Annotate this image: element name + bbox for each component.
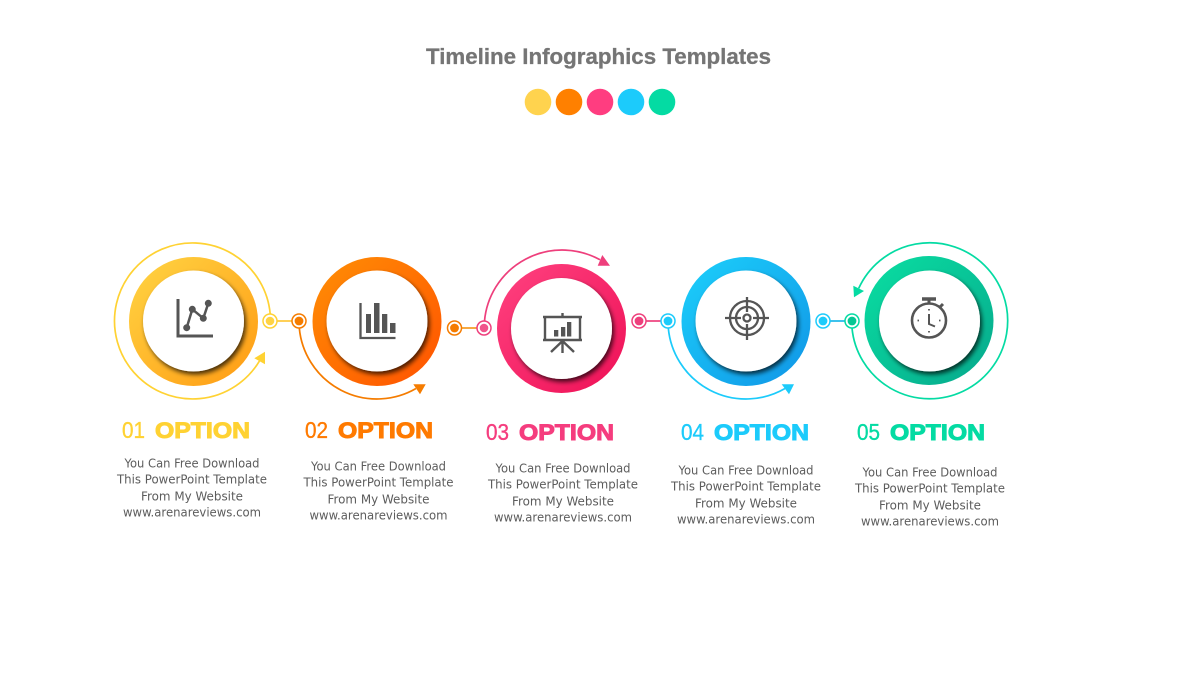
label 2: heading <box>305 417 433 443</box>
step 5: circle with arc <box>852 243 1008 399</box>
label 1: text: You Can Free Download <box>124 456 260 470</box>
label 5: text: From My Website <box>879 498 981 512</box>
label 3: text: You Can Free Download <box>495 461 630 475</box>
label 3: heading <box>486 419 614 445</box>
step 4: circle with arc <box>668 257 810 399</box>
label 3: text: From My Website <box>512 494 614 508</box>
step 3: circle with arc <box>484 250 626 393</box>
icon: stopwatch <box>912 299 946 338</box>
label 1: heading <box>122 417 250 443</box>
icon: target crosshair <box>725 297 769 340</box>
icon: line chart <box>178 299 213 336</box>
label 4: heading <box>681 419 809 445</box>
label 3: heading: OPTION <box>519 420 614 445</box>
label 2: heading: 02 <box>305 417 328 443</box>
label 4: text: From My Website <box>695 496 797 510</box>
label 5: heading: 05 <box>857 419 880 445</box>
connector: step 3 to 4 <box>632 314 675 328</box>
step 2: circle with arc <box>299 257 442 399</box>
label 1: heading: OPTION <box>155 418 250 443</box>
icon: presentation board <box>543 313 582 353</box>
label 4: text: This PowerPoint Template <box>670 479 821 493</box>
label 5: text: www.arenareviews.com <box>861 514 999 528</box>
connector: step 4 to 5 <box>816 314 859 328</box>
label 2: text: www.arenareviews.com <box>310 508 448 522</box>
title: Timeline Infographics Templates <box>426 44 771 69</box>
label 1: text: www.arenareviews.com <box>123 505 261 519</box>
connector: step 2 to 3 <box>448 321 491 335</box>
connector: step 1 to 2 <box>263 314 306 328</box>
label 2: text: From My Website <box>328 492 430 506</box>
label 1: text <box>116 456 267 519</box>
label 1: heading: 01 <box>122 417 145 443</box>
label 1: text: This PowerPoint Template <box>116 472 267 486</box>
label 2: text: You Can Free Download <box>310 459 446 473</box>
label 2: text: This PowerPoint Template <box>303 475 454 489</box>
label 4: text <box>670 463 821 526</box>
label 5: text <box>854 465 1005 528</box>
step 1: circle with arc <box>115 243 270 399</box>
colour dots row <box>525 89 675 115</box>
label 5: heading: OPTION <box>890 420 985 445</box>
label 5: text: This PowerPoint Template <box>854 481 1005 495</box>
label 5: heading <box>857 419 985 445</box>
label 4: text: You Can Free Download <box>678 463 814 477</box>
label 3: text <box>487 461 638 524</box>
label 3: text: www.arenareviews.com <box>494 510 632 524</box>
label 1: text: From My Website <box>141 489 243 503</box>
label 4: text: www.arenareviews.com <box>677 512 815 526</box>
icon: bar chart <box>360 303 396 338</box>
label 5: text: You Can Free Download <box>862 465 998 479</box>
label 2: heading: OPTION <box>338 418 433 443</box>
label 4: heading: 04 <box>681 419 704 445</box>
label 2: text <box>303 459 454 522</box>
label 3: text: This PowerPoint Template <box>487 477 638 491</box>
label 3: heading: 03 <box>486 419 509 445</box>
label 4: heading: OPTION <box>714 420 809 445</box>
